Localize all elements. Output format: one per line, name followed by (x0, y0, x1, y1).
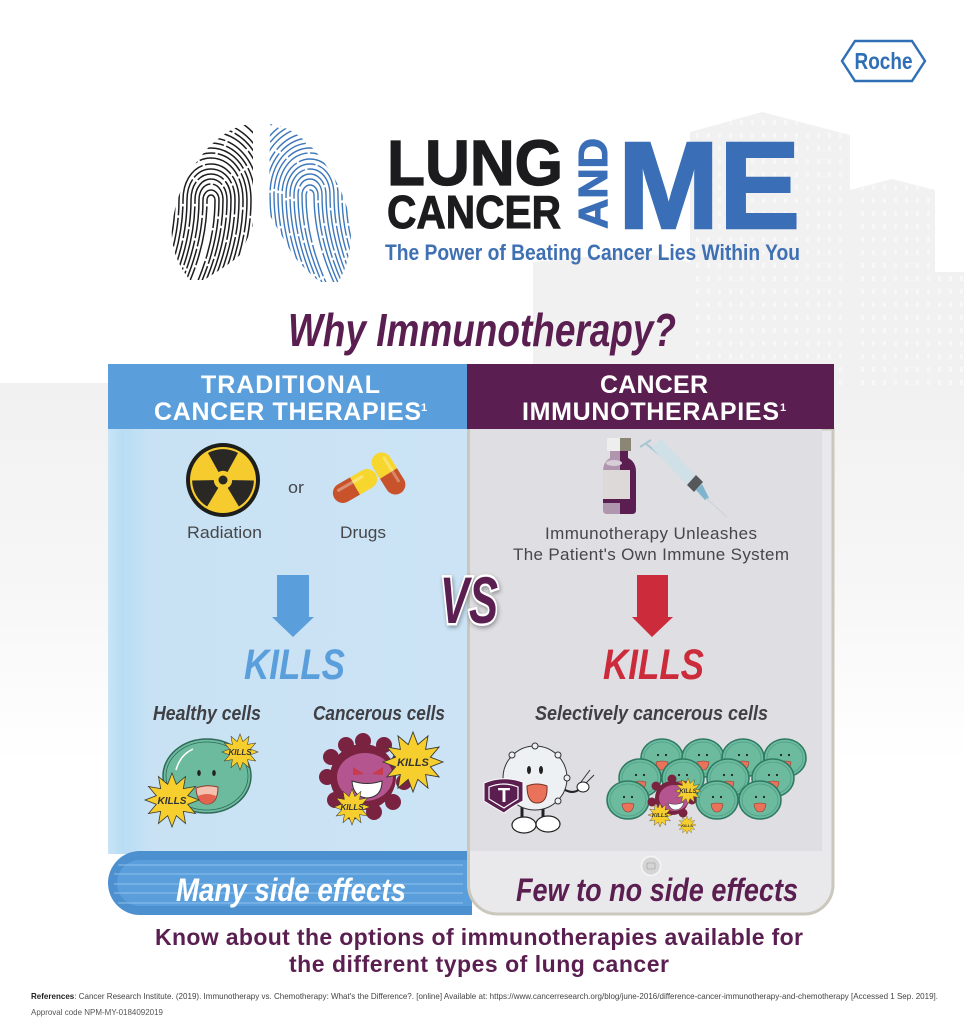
side effects band (108, 851, 472, 915)
label: healthy cells: Healthy cells (153, 703, 261, 725)
tablet frame (468, 429, 833, 914)
description text: Immunotherapy Unleashes (545, 524, 757, 543)
header: 1 (421, 402, 427, 414)
panel: traditional therapies (108, 364, 472, 915)
header (108, 364, 468, 429)
label: cancerous cells: Cancerous cells (313, 703, 445, 725)
header: IMMUNOTHERAPIES (522, 398, 779, 426)
label: radiation: Radiation (187, 523, 262, 542)
icon: cancer cell (319, 732, 443, 825)
header (467, 364, 834, 429)
left lung fingerprint (172, 124, 253, 280)
header: CANCER THERAPIES (154, 398, 421, 426)
icon: cancer cell: KILLS (397, 757, 430, 769)
description text: The Patient's Own Immune System (513, 545, 789, 564)
label: selectively cancerous cells: Selectively cancerous cells (535, 703, 768, 725)
icon: crowd of healthy cells (607, 739, 806, 834)
small cancer cell (648, 774, 701, 834)
icon: syringe (640, 439, 727, 517)
kills label red: KILLS (603, 641, 704, 689)
icon: drug capsules (329, 449, 409, 507)
background: city skyline (533, 112, 964, 385)
side effects band: Many side effects (176, 872, 406, 908)
panel: cancer immunotherapies (467, 364, 834, 914)
call to action (155, 924, 803, 977)
small cancer cell: KILLS (679, 789, 697, 795)
VS badge: VS (440, 563, 498, 637)
icon: healthy cell: KILLS (228, 748, 252, 757)
logo: Roche (842, 41, 925, 81)
approval code: Approval code NPM-MY-0184092019 (31, 1007, 163, 1017)
tablet screen (470, 429, 822, 851)
call to action: Know about the options of immunotherapies available for (155, 924, 803, 950)
panel body (108, 429, 468, 854)
small cancer cell: KILLS (681, 823, 693, 828)
description text (513, 524, 789, 564)
references: References: Cancer Research Institute. (2019). Immunotherapy vs. Chemotherapy: What's the Difference?. [online] Available at: https://www.cancerresearch.org/blog/june-2016/difference-cancer-immunotherapy-and-chemotherapy [Accessed 1 Sep. 2019]. (31, 991, 938, 1001)
logo wordmark: Lung Cancer and Me: CANCER (387, 186, 561, 238)
header: TRADITIONAL (201, 371, 380, 399)
few side effects text: Few to no side effects (516, 872, 798, 908)
icon: T cell character (484, 743, 594, 833)
kills label blue: KILLS (244, 641, 345, 689)
logo wordmark: Lung Cancer and Me (387, 118, 800, 255)
small cancer cell: KILLS (652, 813, 668, 819)
icon: fingerprint lungs (172, 124, 351, 282)
right lung fingerprint (269, 124, 351, 282)
T shield: T (498, 785, 510, 807)
label: drugs: Drugs (340, 523, 386, 542)
home button (642, 856, 660, 876)
call to action: the different types of lung cancer (289, 951, 669, 977)
title: Why Immunotherapy? (288, 304, 676, 356)
icon: radiation (186, 443, 260, 517)
icon: cancer cell: KILLS (340, 803, 364, 812)
logo wordmark: Lung Cancer and Me: AND (570, 138, 616, 229)
arrow: down red (632, 575, 673, 637)
icon: healthy cell: KILLS (158, 796, 187, 807)
icon: healthy cell (145, 734, 258, 827)
arrow: down blue (272, 575, 314, 637)
logo: Roche: Roche (854, 48, 912, 74)
or label: or (288, 478, 304, 497)
logo wordmark: Lung Cancer and Me: LUNG (387, 127, 563, 199)
logo wordmark: Lung Cancer and Me: ME (618, 118, 800, 255)
background: grey gradient band (0, 383, 964, 763)
tagline: The Power of Beating Cancer Lies Within You (385, 240, 800, 265)
header: CANCER (600, 371, 708, 399)
header: 1 (780, 402, 786, 414)
icon: medicine bottle (603, 438, 636, 514)
